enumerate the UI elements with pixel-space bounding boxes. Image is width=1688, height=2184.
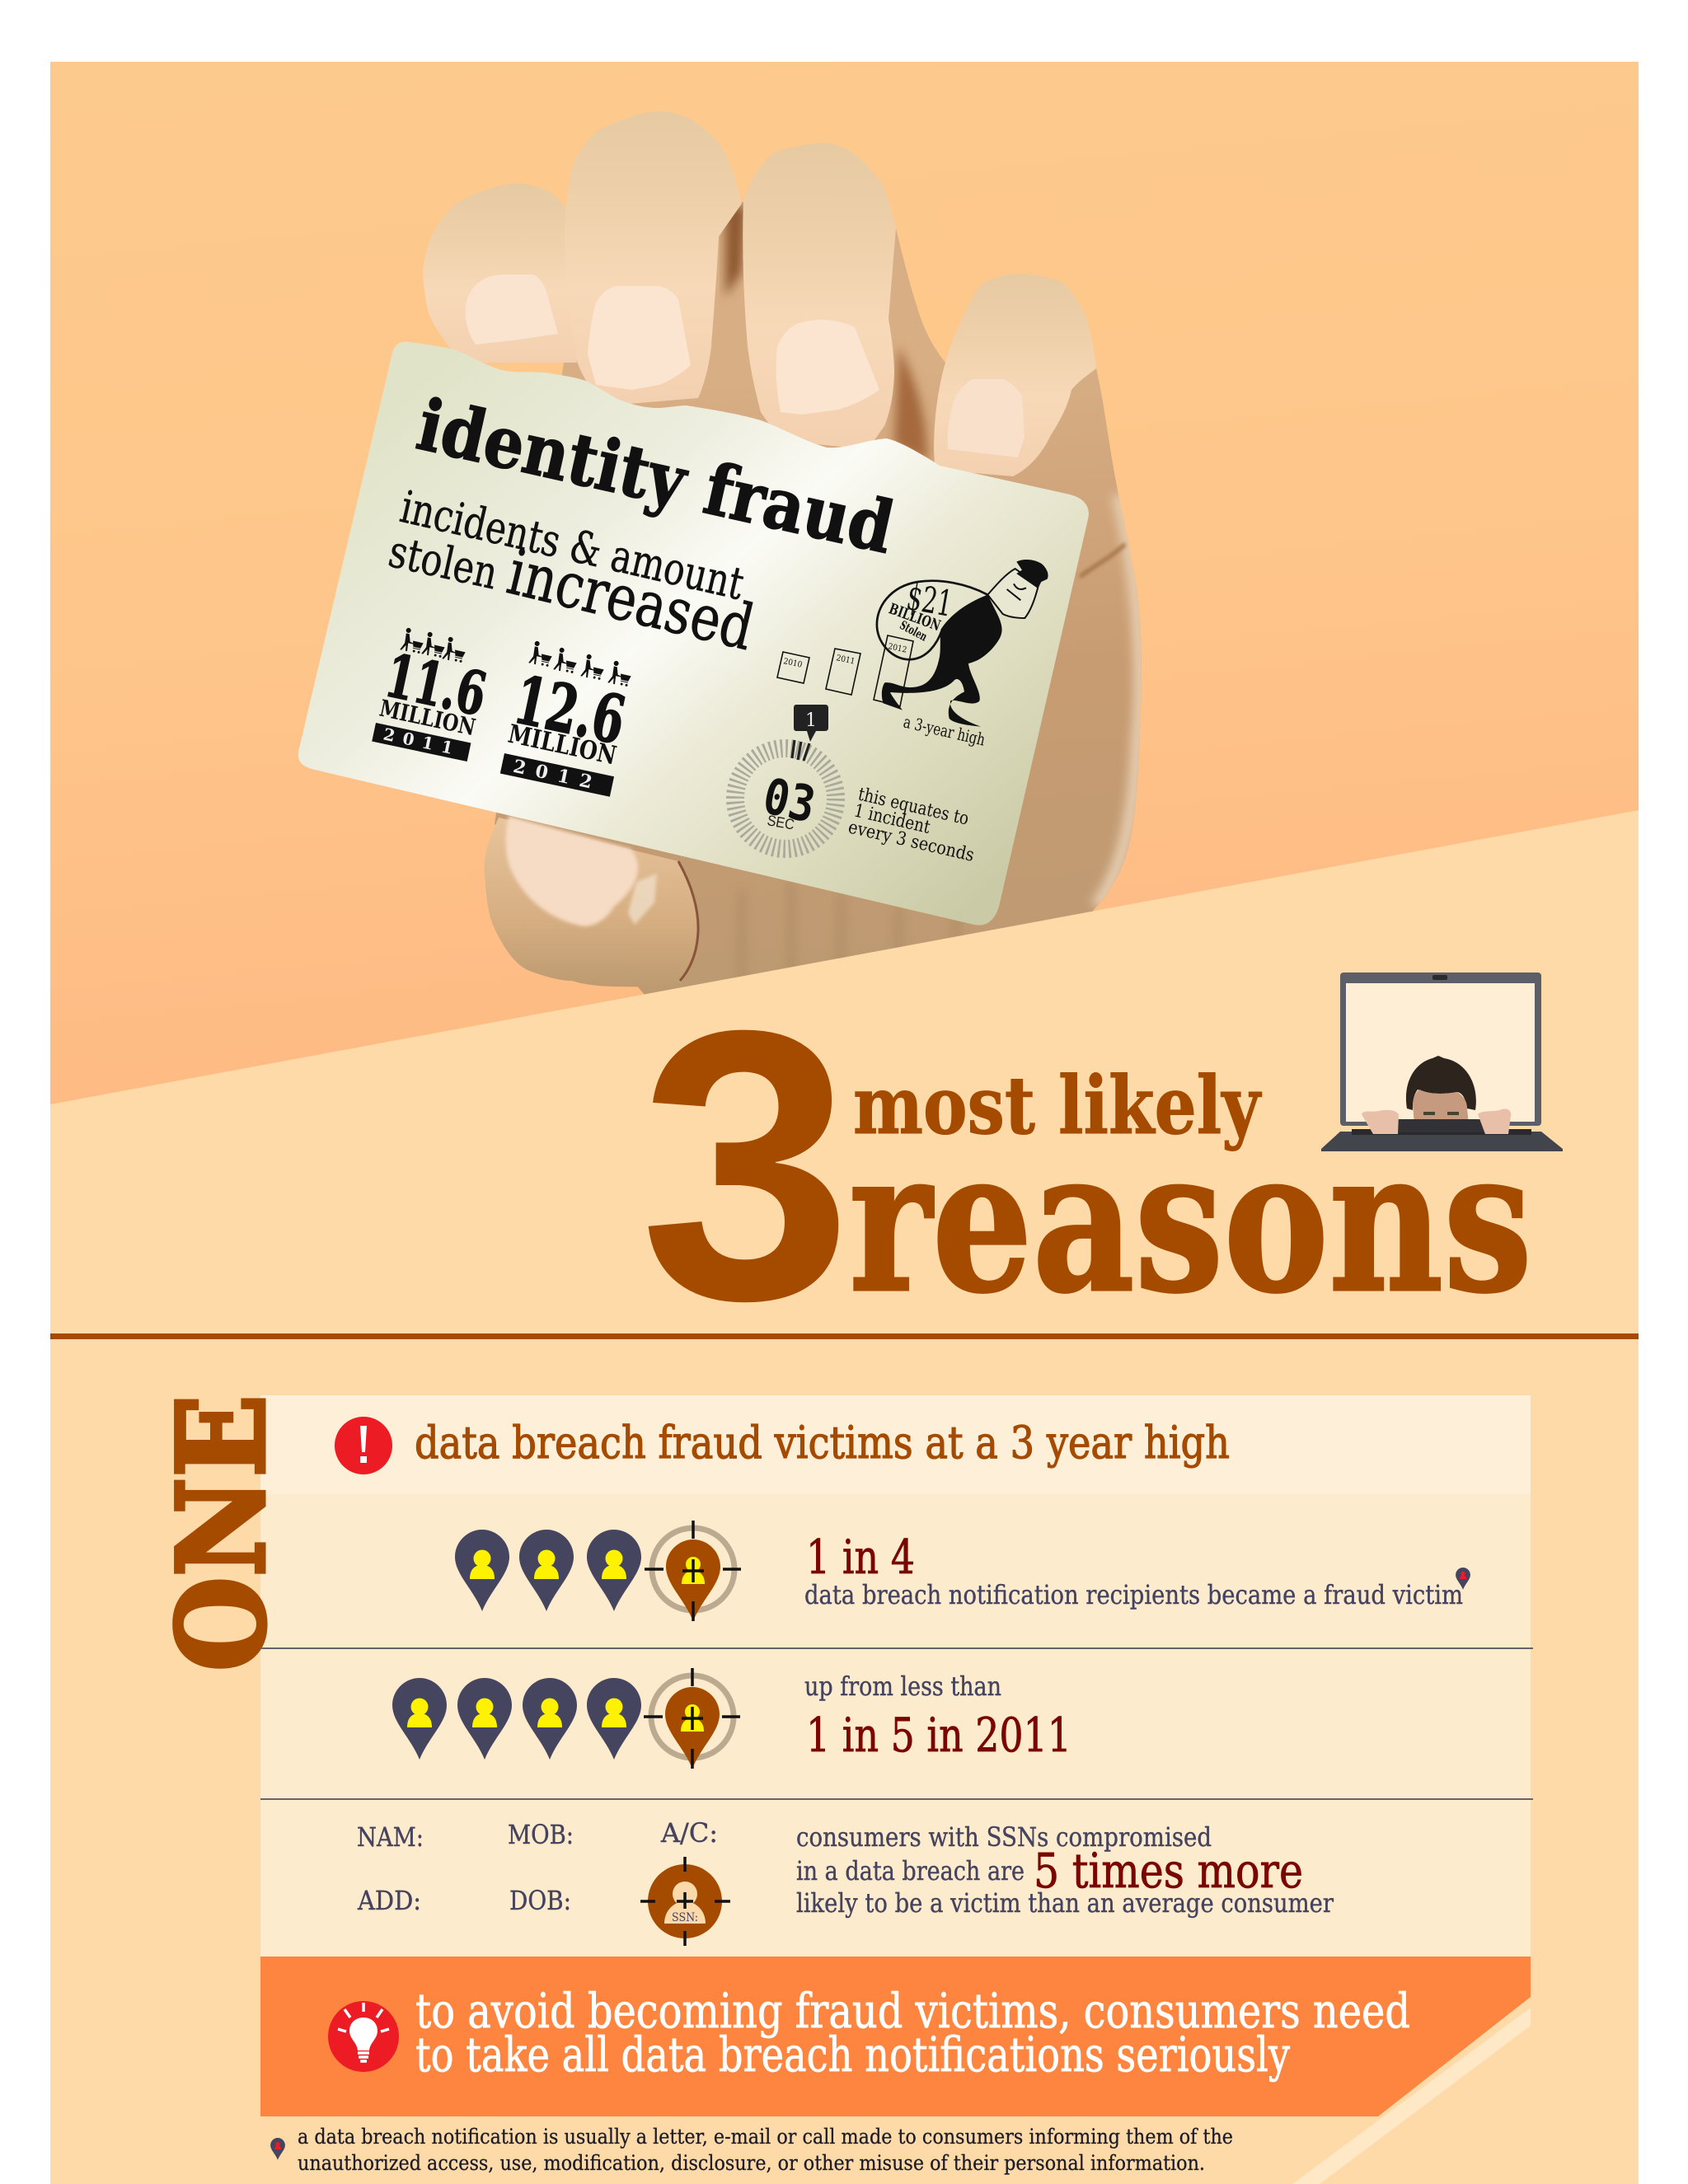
description: data breach notification recipients became a fraud victim [804, 1579, 1463, 1610]
title: 3 most likely reasons [640, 950, 1532, 1380]
up from less than: up from less than [804, 1671, 1001, 1702]
vertical label ONE: ONE [152, 1394, 293, 1671]
SSN statement: consumers with SSNs compromised [796, 1821, 1212, 1853]
personal data labels: NAM: [357, 1821, 424, 1853]
thumb [485, 818, 699, 987]
caption a 3-year high: a 3-year high [902, 711, 987, 750]
thief body [882, 595, 1002, 727]
screen lip [1391, 1119, 1492, 1132]
SEC label: SEC [766, 812, 795, 833]
hand holding the card [423, 111, 1142, 1030]
SSN statement: 5 times more [1034, 1843, 1303, 1899]
icon: footnote pin [270, 2138, 285, 2160]
background: upper orange diagonal panel [50, 62, 1639, 1104]
finger 2 nail [588, 286, 691, 390]
active ticks [792, 740, 809, 761]
finger 3 [743, 143, 896, 449]
shoppers 2012 [528, 640, 634, 687]
section divider [50, 1333, 1639, 1339]
bar 2011: 2011 [835, 654, 856, 667]
card subheading line 2: stolen [384, 525, 503, 599]
bar 2010 [777, 652, 809, 683]
big number 3: 3 [640, 950, 852, 1380]
footnote text: unauthorized access, use, modification, disclosure, or other misuse of their personal information. [298, 2151, 1205, 2175]
stat 2012 [500, 640, 634, 798]
icon: SSN target: SSN: [672, 1911, 698, 1924]
shoppers 2011 [400, 627, 468, 663]
equates caption: every 3 seconds [846, 817, 976, 866]
keyboard [1352, 1129, 1531, 1135]
footnote [270, 2125, 1233, 2175]
personal data labels: ADD: [357, 1885, 421, 1916]
thief head [987, 569, 1039, 618]
finger 4 nail [947, 379, 1025, 457]
section ONE [152, 1394, 1533, 2184]
icon: footnote pin [1456, 1568, 1470, 1590]
banner text [415, 1983, 1410, 2083]
bar 2010: 2010 [782, 657, 803, 670]
digits 03: 03 [758, 767, 820, 835]
SSN statement: in a data breach are [796, 1855, 1025, 1886]
banner stripe [1292, 2008, 1531, 2184]
thumb nail [506, 816, 638, 926]
laptop with peeking man [1321, 972, 1563, 1151]
speech bubble with 1: 1 [805, 710, 817, 731]
year bars and thief [777, 560, 1048, 750]
eyes [1423, 1112, 1459, 1115]
bar 2012: 2012 [887, 642, 907, 655]
row: 1 in 4 [455, 1521, 1470, 1621]
right hand [1478, 1108, 1511, 1134]
laptop lid [1340, 972, 1541, 1126]
sack amount: $21 [903, 577, 955, 626]
value 12.6: 12.6 [508, 661, 632, 759]
header band [260, 1395, 1531, 1494]
stopwatch [735, 705, 836, 849]
personal data labels [357, 1817, 718, 1916]
finger 4 pinky [934, 274, 1096, 476]
personal data labels: DOB: [509, 1885, 571, 1916]
stat 1 in 5 in 2011: 1 in 5 in 2011 [806, 1708, 1071, 1763]
card heading: identity fraud [410, 383, 901, 570]
equates caption [846, 784, 976, 866]
advice banner [260, 1957, 1531, 2184]
most likely: most likely [853, 1059, 1263, 1152]
section heading: data breach fraud victims at a 3 year high [415, 1417, 1230, 1469]
row: 5 times more [357, 1817, 1334, 1946]
row: 1 in 5 [392, 1668, 1071, 1769]
bar 2012 [874, 635, 913, 706]
banner background [260, 1957, 1531, 2116]
laptop screen [1346, 983, 1535, 1122]
card body [298, 342, 1089, 926]
thumb crease [678, 861, 698, 981]
banner text: to take all data breach notifications seriously [415, 2027, 1290, 2083]
bar 2011 [826, 649, 860, 695]
thief face lines [1007, 583, 1026, 600]
footnote text [298, 2125, 1233, 2175]
icon: alert [335, 1417, 392, 1474]
stat 2011 [372, 627, 492, 762]
sack outline [877, 581, 987, 659]
icon: pins 1 in 5 [392, 1668, 740, 1769]
footnote text: a data breach notification is usually a letter, e-mail or call made to consumers informing them of the [298, 2125, 1233, 2149]
identity fraud card [298, 342, 1089, 926]
face [1413, 1090, 1469, 1125]
label million: MILLION [377, 695, 478, 741]
equates caption: this equates to [856, 784, 971, 830]
finger 3 nail [776, 320, 879, 415]
icon: light bulb [328, 2001, 399, 2072]
sack label billion: BILLION [887, 600, 943, 635]
thumb highlight [628, 874, 657, 925]
webcam [1432, 975, 1447, 980]
year 2011: 2011 [382, 724, 463, 760]
reasons: reasons [849, 1107, 1532, 1337]
tick ring [735, 748, 836, 849]
finger 1 [423, 183, 577, 363]
thief mask and hat [1016, 560, 1048, 588]
card subheading: increased: increased [501, 535, 761, 664]
SSN statement [796, 1821, 1334, 1919]
card subheading line 1: incidents & amount [396, 480, 749, 610]
finger 2 [565, 111, 742, 404]
equates caption: 1 incident [852, 800, 932, 838]
icon: pins 1 in 4 [455, 1521, 741, 1621]
personal data labels: MOB: [508, 1819, 574, 1850]
info panel background [260, 1494, 1531, 1957]
year 2012: 2012 [511, 756, 604, 795]
finger 1 nail [466, 274, 558, 344]
hair [1406, 1056, 1476, 1110]
speech bubble with 1 [794, 705, 828, 742]
icon: SSN target [640, 1857, 730, 1946]
personal data labels: A/C: [660, 1817, 718, 1849]
banner text: to avoid becoming fraud victims, consumers need [415, 1983, 1410, 2039]
palm edge light and crease [725, 206, 1141, 997]
palm [495, 202, 1142, 1030]
sack label stolen: Stolen [898, 618, 930, 644]
label million: MILLION [505, 719, 619, 771]
left hand [1362, 1110, 1399, 1134]
stat 1 in 4: 1 in 4 [806, 1530, 915, 1585]
value 11.6: 11.6 [379, 640, 492, 729]
laptop base [1321, 1132, 1563, 1151]
thief carrying money sack [877, 560, 1048, 727]
SSN statement: likely to be a victim than an average consumer [796, 1887, 1334, 1919]
